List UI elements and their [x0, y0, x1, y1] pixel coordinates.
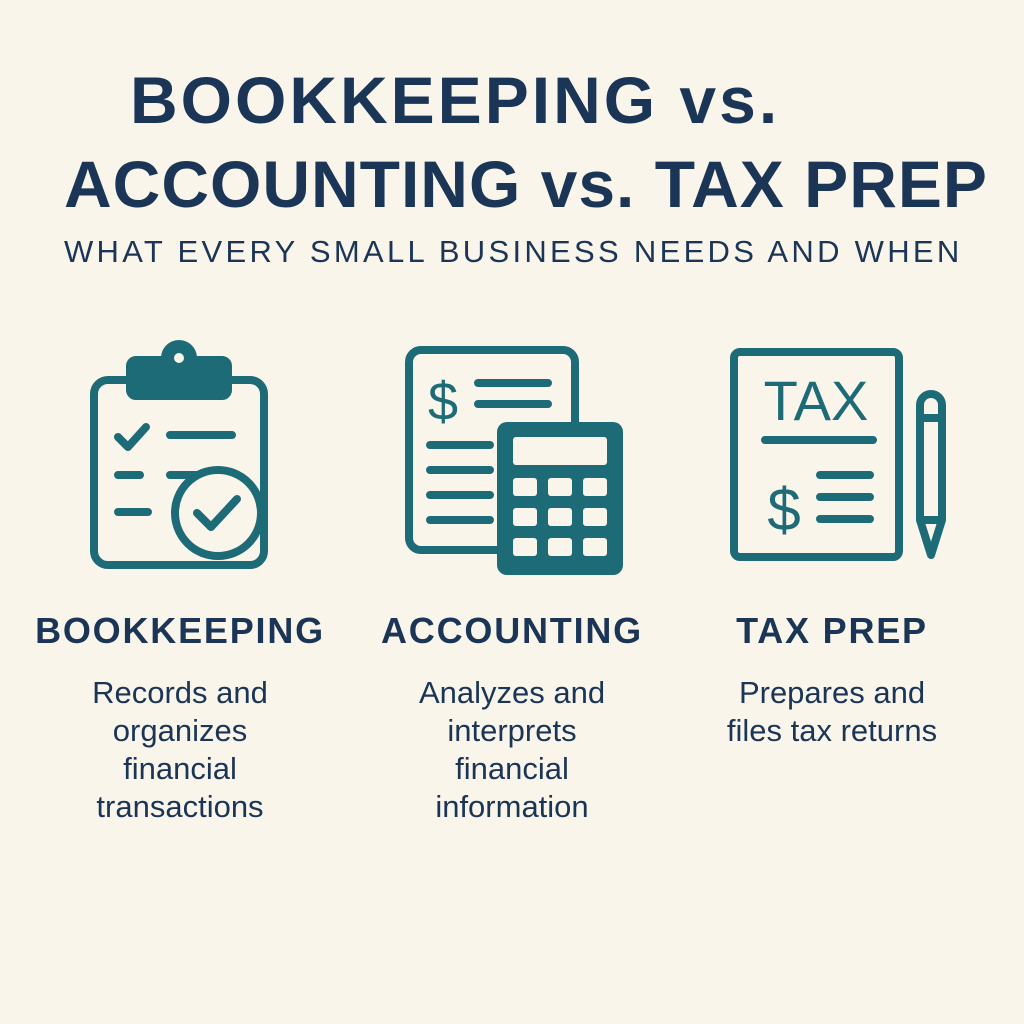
heading: accounting: ACCOUNTING	[381, 610, 643, 651]
text: accounting description: information	[435, 789, 589, 824]
icon: document with calculator: $	[428, 372, 458, 432]
title line 2: ACCOUNTING vs. TAX PREP	[64, 147, 988, 221]
text: tax prep description: Prepares and	[739, 675, 925, 710]
text: accounting description: financial	[455, 751, 569, 786]
icon: tax form with pencil: TAX	[764, 369, 868, 432]
text: tax prep description	[727, 675, 937, 748]
icon: tax form with pencil: $	[767, 476, 801, 543]
icon: clipboard	[94, 344, 264, 565]
column: tax prep	[727, 610, 937, 748]
text: accounting description: Analyzes and	[419, 675, 605, 710]
column: accounting	[381, 610, 643, 824]
title	[64, 63, 988, 269]
title line 1: BOOKKEEPING vs.	[130, 63, 780, 137]
icon: document with calculator	[409, 350, 623, 575]
text: accounting description: interprets	[447, 713, 577, 748]
text: bookkeeping description: organizes	[113, 713, 247, 748]
column: bookkeeping	[35, 610, 325, 824]
text: bookkeeping description: financial	[123, 751, 237, 786]
text: tax prep description: files tax returns	[727, 713, 937, 748]
icon: tax form with pencil	[734, 352, 942, 557]
subtitle: WHAT EVERY SMALL BUSINESS NEEDS AND WHEN	[64, 234, 963, 269]
text: bookkeeping description	[92, 675, 268, 824]
heading: bookkeeping: BOOKKEEPING	[35, 610, 325, 651]
text: accounting description	[419, 675, 605, 824]
text: bookkeeping description: transactions	[96, 789, 264, 824]
heading: tax prep: TAX PREP	[736, 610, 928, 651]
text: bookkeeping description: Records and	[92, 675, 268, 710]
